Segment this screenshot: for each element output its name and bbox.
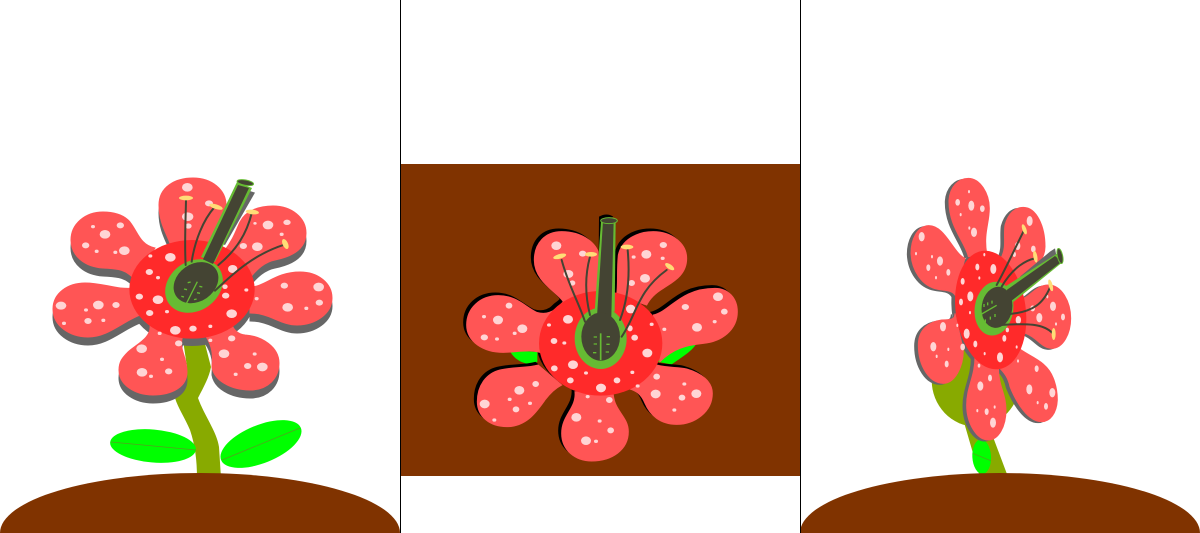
stem bbox=[963, 420, 1007, 475]
pistil shadow bbox=[217, 190, 255, 245]
disc shadow bbox=[536, 288, 659, 393]
soil mound left bbox=[0, 473, 400, 533]
soil background bbox=[400, 164, 800, 476]
left leaf bbox=[109, 426, 197, 466]
soil mound right bbox=[800, 473, 1200, 533]
flower head details bbox=[56, 179, 324, 378]
anthers bbox=[179, 196, 290, 250]
anthers bbox=[1021, 224, 1056, 340]
vein and ovules bbox=[593, 333, 610, 360]
vein and ovules bbox=[181, 282, 202, 305]
pistil green ring bbox=[575, 308, 627, 369]
left leaf bbox=[509, 345, 537, 364]
pistil green ring bbox=[971, 279, 1017, 338]
petal shadow bbox=[464, 229, 734, 458]
panel: top-down view on soil bbox=[400, 164, 800, 476]
disc bbox=[539, 291, 662, 396]
disc bbox=[948, 246, 1034, 374]
panel: side angled view with soil bbox=[0, 178, 400, 533]
stigma knob bbox=[1056, 248, 1064, 264]
right leaf bbox=[214, 410, 308, 478]
pistil dark body bbox=[581, 313, 620, 361]
anthers bbox=[553, 245, 675, 272]
filaments bbox=[562, 250, 667, 337]
filaments bbox=[997, 232, 1053, 333]
disc shadow bbox=[129, 248, 255, 346]
pistil dark body bbox=[166, 254, 226, 312]
pistil green style bbox=[1005, 253, 1062, 303]
petal shadow bbox=[53, 186, 332, 403]
spots bbox=[480, 241, 728, 445]
pistil green style bbox=[201, 182, 252, 262]
stem left bbox=[175, 340, 221, 478]
far leaf bbox=[932, 333, 1020, 427]
pistil shadow bbox=[597, 214, 613, 298]
pistil green ring bbox=[155, 248, 233, 324]
leaf bbox=[971, 439, 992, 474]
pistil green style bbox=[595, 221, 616, 312]
pistil dark style bbox=[203, 185, 249, 264]
disc bbox=[129, 240, 255, 339]
petal shadow bbox=[907, 179, 1067, 441]
pistil dark style bbox=[597, 221, 614, 317]
petals bbox=[467, 232, 737, 461]
disc shadow bbox=[944, 247, 1030, 375]
pistil dark style bbox=[1007, 256, 1062, 301]
stigma knob bbox=[601, 218, 617, 224]
panel: side view with soil bbox=[800, 178, 1200, 533]
petals bbox=[53, 178, 332, 395]
filaments bbox=[185, 200, 284, 291]
spots bbox=[915, 190, 1065, 428]
petals bbox=[911, 178, 1071, 440]
pistil dark body bbox=[979, 285, 1015, 330]
pistil shadow bbox=[1020, 248, 1057, 280]
stigma knob bbox=[237, 179, 254, 187]
vein and ovules bbox=[982, 301, 997, 322]
spots bbox=[56, 183, 324, 378]
panel dividers bbox=[400, 0, 800, 533]
right leaf bbox=[657, 341, 697, 364]
